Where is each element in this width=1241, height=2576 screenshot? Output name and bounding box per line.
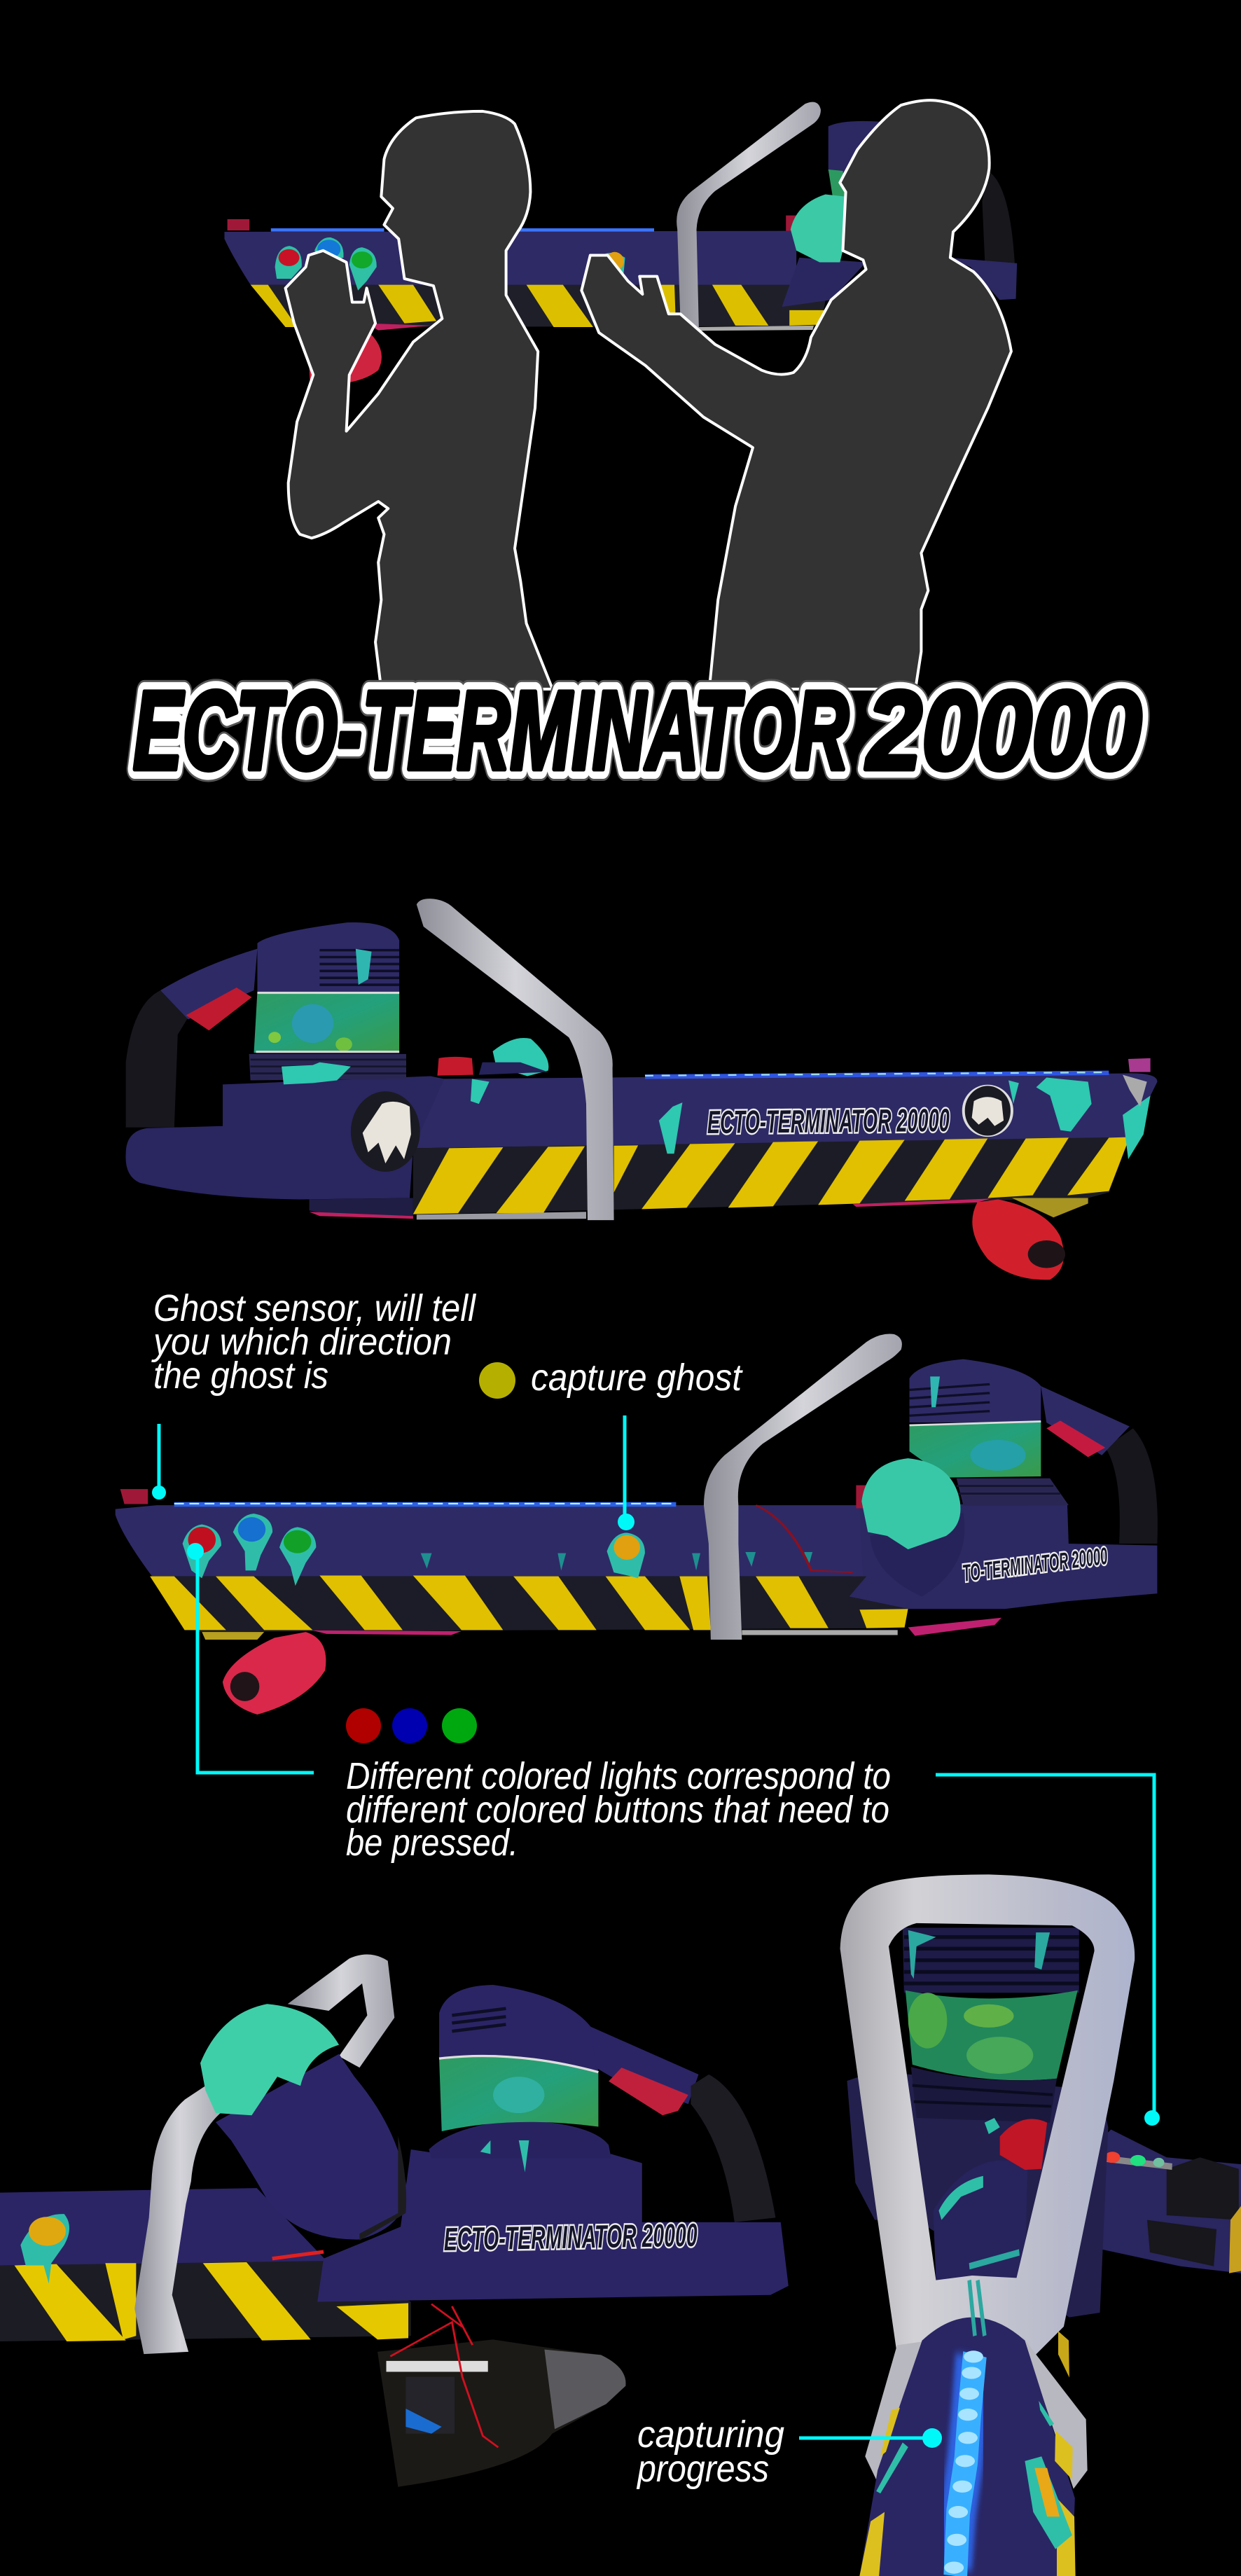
head [910, 1359, 1041, 1422]
red knob [437, 1057, 473, 1076]
wires to strip [969, 2252, 1019, 2336]
slime [876, 2401, 1054, 2493]
chrome arm [417, 899, 614, 1220]
upper chrome arm [288, 1955, 394, 2068]
slime drips [480, 2140, 529, 2172]
red cap [1000, 2119, 1047, 2170]
device photo: front view with LED strip [840, 1874, 1241, 2576]
callout text: coloured lights: be pressed. [346, 1822, 518, 1864]
arrow: capture button leader [618, 1415, 635, 1530]
collar [429, 2120, 611, 2159]
hazard stripes [15, 2262, 408, 2341]
vents [903, 1928, 1079, 1993]
arrow: indicator lights leader [936, 1775, 1160, 2126]
silhouette: right person [581, 100, 1011, 689]
green button [279, 1527, 316, 1586]
device photo: angled view with electronics [0, 1955, 789, 2487]
callout text: capture ghost: capture ghost [531, 1357, 743, 1399]
device seen behind silhouettes [224, 102, 1017, 385]
callout text: coloured lights: Different colored lights correspond to [346, 1755, 891, 1797]
callout text: capturing progress: progress [636, 2448, 769, 2490]
collar [957, 1479, 1069, 1506]
product label on side view: ECTO-TERMINATOR 20000 [707, 1102, 950, 1140]
colour dot: capture [479, 1362, 515, 1399]
yellow button [1025, 2456, 1072, 2549]
handle [590, 2027, 698, 2104]
callout text: ghost sensor: you which direction [151, 1321, 452, 1363]
main tube [116, 1505, 863, 1577]
base [125, 1076, 444, 1200]
arrow: coloured buttons leader [187, 1543, 314, 1773]
slime [282, 1038, 1151, 1159]
yellow tape behind tube [1058, 2331, 1069, 2378]
arrow: capturing progress leader [799, 2428, 942, 2448]
collar [911, 2067, 1057, 2123]
base block [317, 2149, 789, 2301]
title: ECTO-TERMINATOR [133, 667, 849, 793]
scene: two silhouettes holding the device [224, 100, 1017, 689]
wires [756, 1505, 852, 1572]
green lava band [906, 1990, 1078, 2080]
main tube [0, 2188, 328, 2266]
callout text: ghost sensor: Ghost sensor, will tell [153, 1287, 477, 1329]
slime orb pot [870, 1513, 964, 1597]
collar [249, 1054, 406, 1080]
chrome frame [840, 1874, 1135, 2355]
device photo: side view facing right [125, 899, 1158, 1280]
hazard stripes [413, 1137, 1130, 1214]
arrow: ghost sensor leader [152, 1424, 166, 1500]
head [439, 1985, 598, 2072]
hazard stripes [150, 1575, 908, 1630]
main tube [413, 1073, 1158, 1148]
silhouette: left person [286, 111, 553, 689]
red ball [1012, 1198, 1088, 1217]
green lava band [910, 1422, 1041, 1478]
chrome bracket [134, 2086, 226, 2354]
handle [126, 990, 190, 1128]
device photo: side view facing left [116, 1334, 1158, 1715]
indicator LEDs [1104, 2152, 1165, 2167]
LED strip [174, 1500, 676, 1509]
title: ECTO-TERMINATOR [133, 667, 849, 793]
lower tube [859, 2318, 1075, 2576]
red button [183, 1525, 221, 1578]
chrome arm [704, 1334, 902, 1640]
title: 20000 [865, 667, 1142, 793]
yellow tape [859, 2408, 1076, 2576]
yellow button [607, 1533, 645, 1578]
product label on rear: TO-TERMINATOR 20000 [961, 1543, 1109, 1587]
nose [1128, 1058, 1151, 1072]
colour dots: red blue green [346, 1708, 477, 1743]
green lava band [439, 2056, 598, 2131]
callout text: capturing progress: capturing [637, 2414, 784, 2456]
handle and rear [1105, 1428, 1158, 1544]
drilled holes [421, 1552, 812, 1570]
title: 20000 [865, 667, 1142, 793]
red ball [223, 1632, 326, 1715]
callout text: coloured lights [346, 1755, 891, 1864]
electronics bay [377, 2304, 625, 2487]
red wires [272, 2252, 324, 2259]
blue button [233, 1514, 272, 1570]
slime [938, 2118, 1000, 2220]
slime dome [200, 2004, 339, 2115]
LED strip [645, 1073, 1109, 1076]
ghost badge [964, 1086, 1012, 1136]
callout text: coloured lights: different colored buttons that need to [346, 1789, 889, 1831]
callout text: ghost sensor: the ghost is [153, 1355, 328, 1397]
product label on angled view: ECTO-TERMINATOR 20000 [443, 2217, 698, 2257]
chrome flanges [865, 2336, 1088, 2489]
yellow button [20, 2214, 69, 2284]
green lava band [254, 992, 399, 1053]
ghost sticker [351, 1091, 420, 1172]
slime pot tube [216, 2054, 407, 2240]
body [847, 2072, 1108, 2318]
head with vents [257, 922, 399, 992]
title: 20000 [865, 667, 1142, 793]
side arm [1095, 2130, 1241, 2273]
callout text: capturing progress [636, 2414, 784, 2490]
capturing progress LEDs [944, 2350, 983, 2576]
callout text: ghost sensor [151, 1287, 477, 1397]
title: ECTO-TERMINATOR [133, 667, 849, 793]
